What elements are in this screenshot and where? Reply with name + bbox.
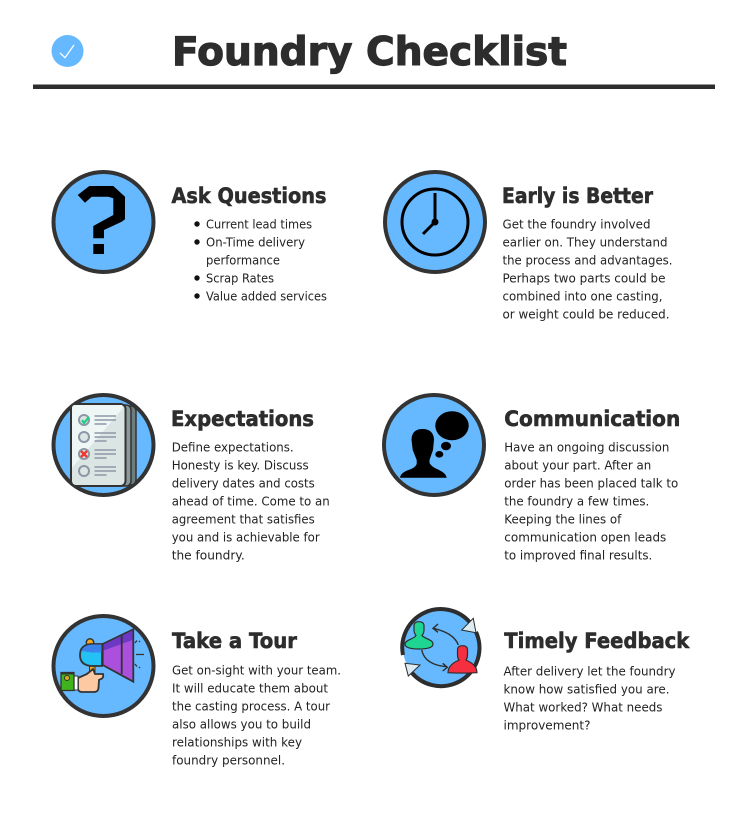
panel: early is better: [385, 172, 672, 322]
heading: Communication: [504, 407, 680, 431]
panel: expectations: [54, 395, 330, 564]
body text: Perhaps two parts could be: [502, 272, 666, 286]
body text: the foundry.: [172, 548, 245, 564]
body text: order has been placed talk to: [504, 476, 678, 492]
icon: question mark: [54, 172, 154, 272]
body text: delivery dates and costs: [172, 476, 315, 492]
body text: [172, 440, 330, 564]
icon: megaphone: [54, 616, 154, 716]
body text: you and is achievable for: [172, 530, 320, 546]
bullet list: On-Time delivery: [206, 236, 305, 250]
body text: agreement that satisfies: [172, 512, 315, 528]
body text: Keeping the lines of: [504, 512, 622, 528]
panel: communication: [384, 395, 680, 564]
panel: timely feedback: [402, 609, 690, 734]
body text: combined into one casting,: [502, 290, 662, 304]
bullet list: Scrap Rates: [206, 272, 274, 286]
body text: improvement?: [504, 718, 590, 734]
title rule: [33, 84, 715, 89]
body text: Have an ongoing discussion: [504, 440, 669, 456]
body text: [504, 440, 678, 564]
body text: or weight could be reduced.: [502, 308, 670, 322]
body text: What worked? What needs: [504, 700, 663, 716]
body text: [502, 218, 672, 322]
body text: [172, 664, 341, 768]
bullet list: performance: [206, 254, 280, 268]
body text: the casting process. A tour: [172, 700, 331, 714]
body text: Get the foundry involved: [502, 218, 650, 232]
bullet list: [194, 218, 327, 304]
bullet list: Current lead times: [206, 218, 312, 232]
panel: ask questions: [54, 172, 327, 304]
body text: foundry personnel.: [172, 754, 285, 768]
body text: Get on-sight with your team.: [172, 664, 341, 678]
body text: about your part. After an: [504, 458, 651, 474]
body text: relationships with key: [172, 736, 302, 750]
bullet list: Value added services: [206, 290, 327, 304]
heading: Expectations: [171, 407, 314, 431]
body text: Define expectations.: [172, 440, 294, 456]
heading: Ask Questions: [172, 184, 326, 208]
heading: Timely Feedback: [504, 629, 690, 653]
icon: thinking person: [384, 395, 484, 495]
body text: the foundry a few times.: [504, 494, 649, 510]
body text: also allows you to build: [172, 718, 311, 732]
body text: Honesty is key. Discuss: [172, 458, 309, 474]
heading: Take a Tour: [172, 629, 298, 653]
icon: checklist document: [54, 395, 154, 495]
heading: Early is Better: [502, 184, 654, 208]
icon: clock: [385, 172, 485, 272]
body text: After delivery let the foundry: [504, 664, 676, 680]
title: Foundry Checklist: [172, 30, 567, 75]
body text: communication open leads: [504, 530, 667, 546]
body text: the process and advantages.: [502, 254, 672, 268]
panel: take a tour: [54, 616, 341, 768]
body text: [504, 664, 676, 734]
icon: feedback loop people: [402, 609, 480, 686]
body text: It will educate them about: [172, 682, 328, 696]
body text: to improved final results.: [504, 548, 652, 564]
header icon: check badge: [52, 35, 84, 67]
body text: earlier on. They understand: [502, 236, 668, 250]
body text: ahead of time. Come to an: [172, 494, 330, 510]
body text: know how satisfied you are.: [504, 682, 670, 698]
